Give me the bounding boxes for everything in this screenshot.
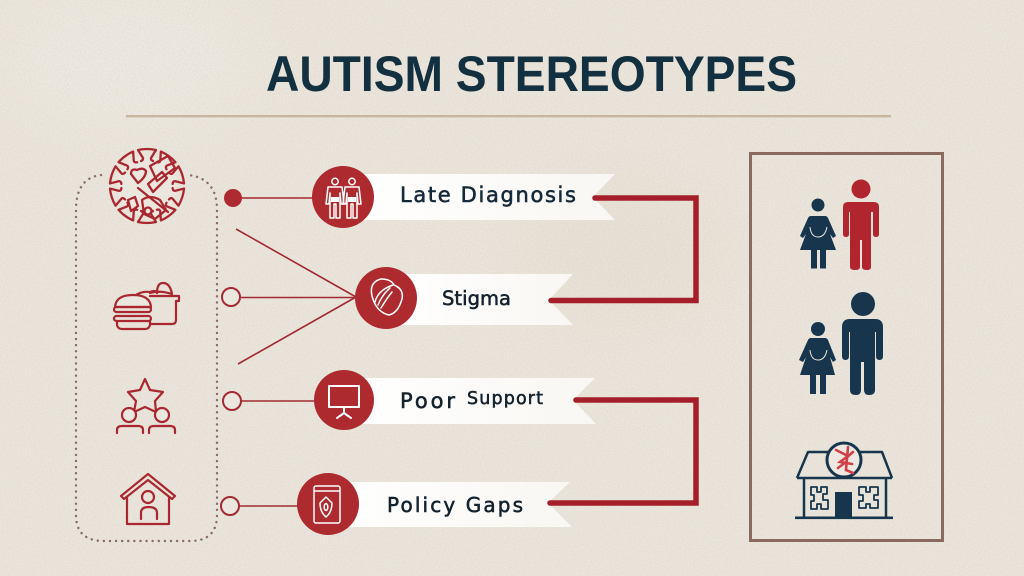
title: AUTISM STEREOTYPES	[266, 46, 797, 102]
icon: policy document with shield	[314, 486, 340, 523]
icon: house with broken puzzle	[795, 443, 893, 519]
bracket arrow: late diagnosis and stigma	[551, 198, 696, 300]
figure: navy man	[842, 292, 883, 395]
icon: house with person	[121, 474, 175, 524]
ribbon: stigma	[355, 267, 573, 329]
icon: star above two people	[117, 379, 175, 433]
label: poor: Poor	[400, 389, 455, 413]
ribbon: late diagnosis	[312, 166, 615, 228]
icon: woman and red man	[800, 180, 879, 270]
label: stigma: Stigma	[442, 287, 511, 310]
dotted grouping frame	[76, 175, 217, 541]
figure: small woman	[799, 322, 836, 394]
icon: presentation board	[329, 386, 359, 418]
label: late diagnosis: Late Diagnosis	[400, 183, 576, 207]
icon: two figures	[326, 178, 361, 218]
figure: small woman	[800, 198, 836, 268]
icon: woman and navy man	[799, 292, 883, 395]
bracket arrow: poor support and policy gaps	[550, 400, 696, 503]
connector: stigma with fan lines	[222, 229, 356, 364]
icon: leaf in ring	[371, 279, 402, 315]
title rule	[126, 115, 891, 117]
label: support: Support	[467, 389, 543, 409]
ribbon: poor support	[314, 370, 596, 430]
connector: late diagnosis	[224, 189, 314, 207]
connector: poor support	[223, 392, 316, 410]
panel: outcomes frame	[750, 154, 942, 540]
ribbon: policy gaps	[297, 473, 572, 535]
figure: red man	[843, 180, 879, 270]
connector: policy gaps	[221, 497, 298, 515]
icon: gear with stereotype fragments	[109, 149, 185, 223]
label: policy gaps: Policy Gaps	[387, 493, 523, 517]
icon: burger and food box	[114, 283, 179, 329]
